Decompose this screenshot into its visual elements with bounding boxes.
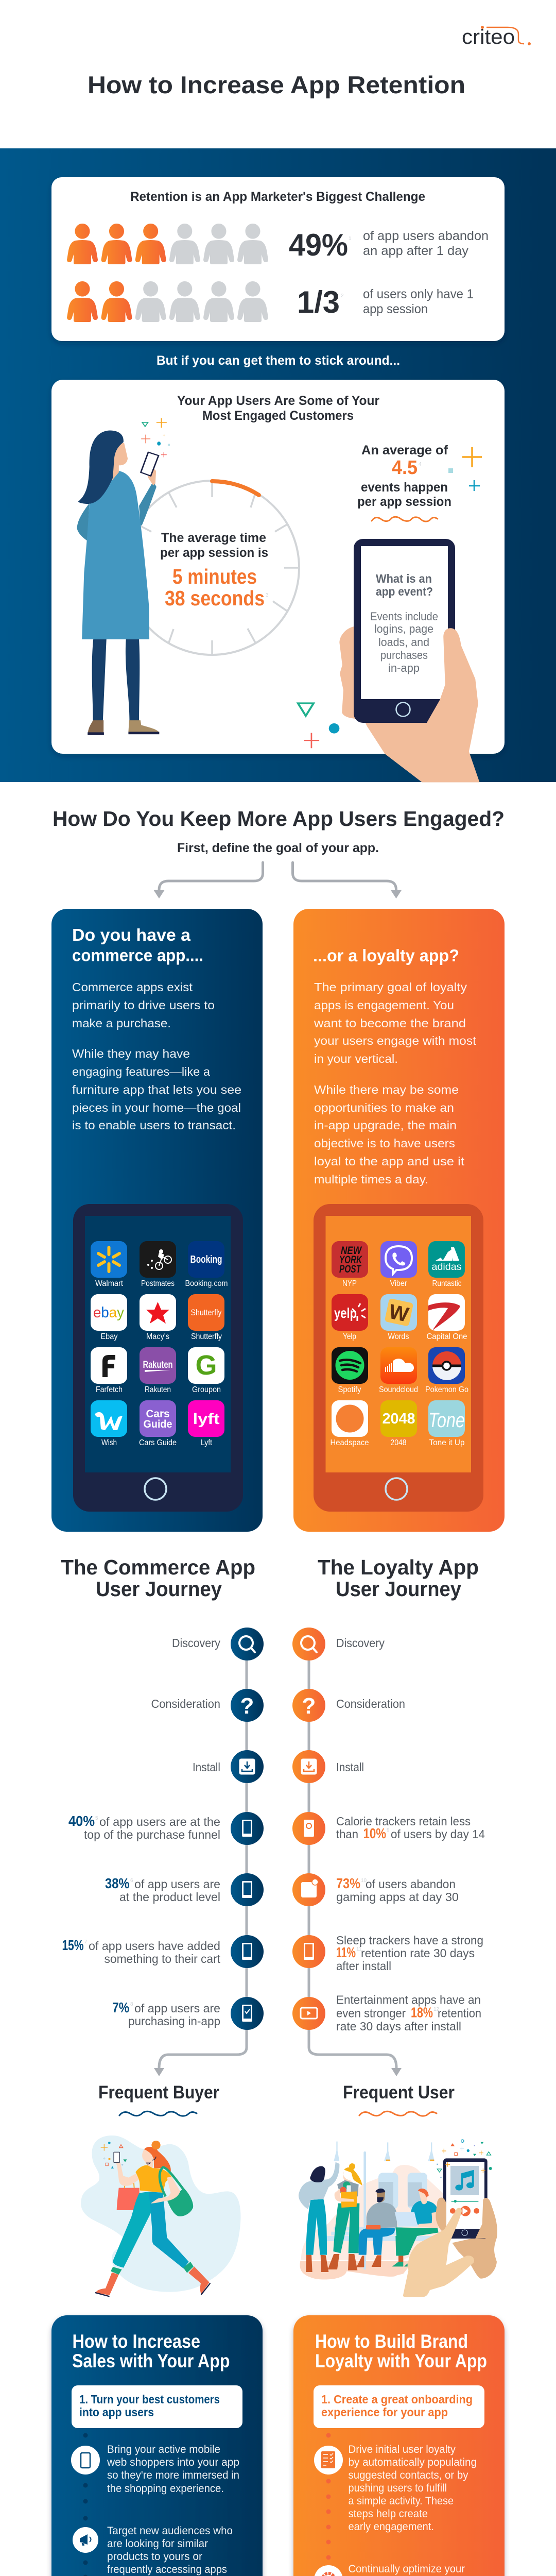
stat: 1/3: app session [363, 302, 428, 316]
app icon: SoundCloud [380, 1347, 417, 1384]
heading: loyalty journey [318, 1555, 479, 1601]
icon: plus decorations [448, 447, 482, 491]
text: what is an app event [370, 572, 438, 674]
panel: blue stats section [0, 148, 556, 782]
step: 38% [105, 1873, 264, 1906]
text: events per session: events happen [361, 480, 448, 495]
app icon: 2048: 2048 [382, 1411, 415, 1427]
step: 7%: purchasing in-app [128, 2014, 220, 2028]
card heading: Most Engaged Customers [202, 409, 354, 423]
panel heading: Loyalty with Your App [315, 2350, 487, 2371]
app icon: Pokemon Go [428, 1347, 465, 1384]
timeline: commerce journey [62, 1628, 264, 2076]
panel: loyalty app [293, 909, 505, 1532]
step: install [292, 1750, 364, 1783]
step: consideration: Consideration [151, 1697, 220, 1710]
app icon: Macy's [140, 1294, 176, 1331]
step: calorie trackers: 9 [387, 1827, 390, 1833]
step: calorie trackers: Calorie trackers retain less [336, 1815, 471, 1828]
stat: 1/3: 1/3 [297, 285, 340, 319]
tactic: target new audiences: are looking for similar [107, 2538, 208, 2550]
panel: increase sales [51, 2315, 263, 2576]
text: what is an app event: purchases [380, 649, 428, 662]
app labels: Lyft [201, 1438, 212, 1447]
arrow: to commerce [153, 862, 263, 899]
app icon: Groupon: G [195, 1350, 217, 1381]
app labels: Headspace [331, 1438, 369, 1447]
app labels: Rakuten [145, 1385, 171, 1394]
panel heading [72, 2331, 230, 2371]
illustration: frequent user on subway [299, 2140, 497, 2297]
card: biggest challenge [51, 177, 505, 341]
step: discovery: Discovery [172, 1636, 220, 1650]
step: sleep trackers: retention rate 30 days [361, 1946, 475, 1960]
text: events per session: An average of [361, 443, 448, 457]
tactic: initial user loyalty: a simple activity. These [348, 2495, 454, 2507]
step: 38%: 38% [105, 1875, 130, 1891]
heading: commerce journey [61, 1555, 255, 1601]
stat: 49%: of app users abandon [363, 229, 489, 243]
step: 7%: 8 [130, 2002, 133, 2007]
step: consideration: ? [240, 1693, 254, 1719]
app icon: Tone It Up [428, 1400, 465, 1437]
app icon: NYP [332, 1241, 368, 1278]
text: what is an app event: Events include [370, 610, 438, 623]
step: discovery [172, 1628, 264, 1660]
app icon: Wish [91, 1400, 127, 1437]
app icon: Booking: Booking [190, 1254, 222, 1265]
step: gaming apps: of users abandon [366, 1877, 456, 1891]
title: How to Increase App Retention [88, 71, 465, 98]
app icon: Shutterfly: Shutterfly [190, 1308, 222, 1317]
squiggle [372, 517, 438, 521]
panel body text: The primary goal of loyalty [314, 980, 467, 994]
step: entertainment apps: rate 30 days after install [336, 2020, 461, 2033]
app icon: NYP: YORK [339, 1254, 362, 1266]
panel body text: While there may be some [314, 1083, 459, 1096]
tactic: initial user loyalty: steps help create [348, 2508, 428, 2520]
panel body text: make a purchase. [72, 1016, 171, 1030]
panel heading: Do you have a [72, 925, 191, 944]
tactic: initial user loyalty: early engagement. [348, 2521, 434, 2533]
text: events per session: 4.5 [392, 457, 418, 479]
panel heading [315, 2331, 487, 2371]
tactic: target new audiences [73, 2525, 233, 2576]
illustration: woman with phone [77, 431, 159, 735]
step: 40%: 40% [68, 1813, 95, 1829]
step box 1: into app users [79, 2405, 154, 2419]
step: sleep trackers: after install [336, 1959, 391, 1973]
app labels: Postmates [141, 1279, 175, 1288]
app labels: Pokemon Go [425, 1385, 468, 1394]
panel body text: loyal to the app and use it [314, 1155, 465, 1168]
text: what is an app event: What is an [376, 572, 432, 585]
panel heading: commerce app.... [72, 946, 203, 964]
app labels: Wish [101, 1438, 117, 1447]
step: sleep trackers: 11% [336, 1944, 356, 1960]
step: calorie trackers: of users by day 14 [391, 1827, 485, 1841]
app labels: Tone it Up [429, 1438, 465, 1447]
step box 1 [314, 2385, 484, 2428]
panel body text: pieces in your home—the goal [72, 1101, 241, 1114]
step: 15%: 15% [62, 1937, 84, 1953]
app labels: Capital One [426, 1332, 467, 1341]
panel body text: opportunities to make an [314, 1101, 454, 1114]
logo: criteo: criteo [462, 26, 515, 48]
text: average session time [160, 531, 269, 610]
stat: 1/3 [297, 285, 474, 319]
app icon: Rakuten: Rakuten [143, 1360, 173, 1370]
text: events per session [357, 443, 451, 509]
card heading: Retention is an App Marketer's Biggest Challenge [130, 190, 425, 204]
step: entertainment apps: 18% [411, 2004, 433, 2021]
app labels: Farfetch [96, 1385, 123, 1394]
text: what is an app event: logins, page [374, 622, 433, 635]
stat: 49%: 49% [289, 228, 348, 262]
app icon: Headspace [332, 1400, 368, 1437]
panel body text: furniture app that lets you see [72, 1083, 241, 1096]
app icon: Lyft [188, 1400, 224, 1437]
illustration: commerce phone [73, 1204, 243, 1512]
panel body text: in-app upgrade, the main [314, 1118, 457, 1132]
step: sleep trackers: Sleep trackers have a strong [336, 1934, 483, 1947]
step: gaming apps: 10 [361, 1878, 367, 1884]
heading: commerce journey: User Journey [96, 1577, 222, 1601]
app icon: Rakuten [140, 1347, 176, 1384]
icon row: 2 of 6 people [67, 281, 268, 322]
app labels: Walmart [95, 1279, 124, 1288]
icon: confetti near woman [141, 418, 170, 457]
step: 7%: 7% [112, 1999, 129, 2015]
connector dots [73, 2433, 98, 2576]
step: 15%: something to their cart [104, 1952, 221, 1965]
panel body text: apps is engagement. You [314, 998, 454, 1012]
app labels: NYP [342, 1279, 357, 1288]
step: install [193, 1750, 264, 1783]
illustration: frequent buyer walking [81, 2136, 240, 2296]
step box 1: experience for your app [321, 2405, 448, 2419]
heading: loyalty journey: User Journey [336, 1577, 461, 1601]
step: install: Install [193, 1760, 220, 1774]
app icon: Spotify [332, 1347, 368, 1384]
app labels: Spotify [338, 1385, 361, 1394]
text: average session time: The average time [161, 531, 266, 545]
step: consideration [151, 1689, 264, 1722]
arrow: to loyalty [292, 862, 402, 899]
illustration: phone in hand [339, 539, 480, 782]
panel: commerce app [51, 909, 263, 1532]
panel heading: ...or a loyalty app? [313, 946, 459, 965]
tactic: initial user loyalty: Drive initial user loyalty [348, 2444, 456, 2455]
tactic: initial user loyalty: suggested contacts, or by [348, 2469, 468, 2481]
app icon: Yelp [332, 1294, 368, 1331]
app labels: Macy's [146, 1332, 169, 1341]
panel body text: your users engage with most [314, 1034, 477, 1047]
step: 15%: of app users have added [89, 1939, 220, 1953]
app icon: Farfetch [91, 1347, 127, 1384]
app icon: eBay [91, 1294, 127, 1331]
step: 15%: 7 [84, 1939, 88, 1945]
app icon: Walmart [91, 1241, 127, 1278]
card heading: Your App Users Are Some of Your [177, 394, 379, 408]
heading: loyalty journey: The Loyalty App [318, 1555, 479, 1579]
app labels: Cars Guide [139, 1438, 177, 1447]
connector dots [316, 2433, 341, 2576]
app icon: Cars Guide [140, 1400, 176, 1437]
panel body text [72, 980, 241, 1132]
text: what is an app event: app event? [376, 585, 433, 598]
app icon: Words [380, 1294, 417, 1331]
app labels [331, 1279, 468, 1447]
tactic: mobile web shoppers: Bring your active mobile [107, 2444, 220, 2455]
panel body text [314, 980, 477, 1186]
panel body text: in your vertical. [314, 1052, 398, 1065]
app icon: NYP: NEW [341, 1245, 362, 1257]
app labels: Words [388, 1332, 409, 1341]
card: engaged customers [51, 380, 505, 782]
timeline: loyalty journey [292, 1628, 485, 2076]
step: install: Install [336, 1760, 364, 1774]
text: average session time: 38 seconds [165, 586, 265, 610]
text: events per session: per app session [357, 495, 451, 509]
step box 1: 1. Create a great onboarding [321, 2393, 473, 2406]
step: 7%: of app users are [134, 2002, 220, 2015]
app labels [95, 1279, 228, 1447]
panel body text: While they may have [72, 1047, 190, 1060]
step: 38%: at the product level [119, 1890, 220, 1904]
app icon: Shutterfly [188, 1294, 224, 1331]
subheading: First, define the goal of your app. [177, 841, 379, 855]
panel body text: engaging features—like a [72, 1065, 210, 1078]
step: consideration: Consideration [336, 1697, 405, 1710]
tactic: mobile web shoppers [71, 2444, 239, 2495]
step: entertainment apps: Entertainment apps have an [336, 1993, 481, 2006]
step: discovery: Discovery [336, 1636, 385, 1650]
tactic: target new audiences: frequently accessing apps [107, 2564, 227, 2575]
step: 38%: 6 [130, 1878, 133, 1884]
app icon: Yelp: yelp [334, 1305, 357, 1321]
stat: 49% [289, 228, 489, 262]
panel heading: How to Increase [72, 2331, 200, 2352]
panel body text: primarily to drive users to [72, 998, 215, 1012]
step: gaming apps: gaming apps at day 30 [336, 1890, 459, 1904]
app icon: adidas: adidas [431, 1262, 461, 1273]
panel heading [72, 925, 203, 964]
app labels: Booking.com [185, 1279, 228, 1288]
app icon: Tone It Up: Tone [428, 1409, 465, 1432]
card heading [177, 394, 379, 423]
app icon: Words: W [387, 1300, 411, 1327]
tactic: initial user loyalty [314, 2444, 477, 2533]
step box 1 [72, 2385, 242, 2428]
text: average session time: per app session is [160, 546, 268, 560]
heading: frequent user: Frequent User [343, 2082, 455, 2103]
step: entertainment apps: even stronger [336, 2006, 406, 2020]
stat: 1/3: 2 [341, 293, 344, 299]
app icon: Cars Guide: Cars [146, 1408, 170, 1420]
app labels: Soundcloud [379, 1385, 418, 1394]
step: sleep trackers: 11 [356, 1946, 362, 1952]
app labels: Viber [390, 1279, 407, 1288]
tactic: continually optimize: Continually optimize your [348, 2563, 465, 2575]
step: 40% [68, 1812, 264, 1845]
stat: 49%: 1 [349, 236, 352, 242]
arrow head [391, 2068, 402, 2076]
step: entertainment apps: retention [438, 2006, 481, 2020]
app icon: adidas [428, 1241, 465, 1278]
step: 7% [112, 1997, 264, 2030]
tactic: mobile web shoppers: the shopping experience. [107, 2483, 224, 2495]
step: calorie trackers: 10% [363, 1825, 386, 1841]
panel body text: multiple times a day. [314, 1173, 428, 1186]
icon row: 3 of 6 people [67, 224, 268, 264]
text: what is an app event: in-app [388, 662, 420, 674]
step: consideration: ? [302, 1693, 316, 1719]
icon: confetti near phone [298, 703, 339, 748]
stat: 1/3: of users only have 1 [363, 287, 474, 301]
arrow head [154, 2068, 164, 2076]
heading: frequent user [343, 2082, 455, 2116]
text: average session time: 5 minutes [172, 565, 257, 588]
tactic: initial user loyalty: by automatically populating [348, 2456, 477, 2468]
step: 40%: 5 [95, 1816, 98, 1821]
panel body text: Commerce apps exist [72, 980, 193, 994]
app labels: Ebay [101, 1332, 117, 1341]
chart: session clock dial [125, 481, 299, 655]
text: what is an app event: loads, and [378, 636, 429, 649]
app icon: Lyft: lyft [193, 1411, 220, 1428]
step: 40%: of app users are at the [99, 1815, 220, 1828]
stat: 49%: an app after 1 day [363, 244, 468, 258]
app icon: eBay: ebay [93, 1304, 124, 1321]
step: consideration [292, 1689, 405, 1722]
app labels: Runtastic [432, 1279, 461, 1288]
panel: brand loyalty [293, 2315, 505, 2576]
text: events per session: 4 [419, 462, 422, 467]
heading: frequent buyer [98, 2082, 219, 2116]
text: transition line: But if you can get them to stick around... [157, 353, 400, 368]
step: sleep trackers [292, 1934, 483, 1973]
tactic: mobile web shoppers: so they're more immersed in [107, 2469, 239, 2481]
app icon: Cars Guide: Guide [143, 1418, 172, 1430]
panel body text: is to enable users to transact. [72, 1118, 236, 1132]
app icon: Groupon [188, 1347, 224, 1384]
panel heading: Sales with Your App [72, 2350, 230, 2371]
illustration: loyalty phone [314, 1204, 483, 1512]
step: 15% [62, 1935, 264, 1968]
step: entertainment apps [292, 1993, 481, 2033]
step: discovery [292, 1628, 385, 1660]
heading: frequent buyer: Frequent Buyer [98, 2082, 219, 2103]
step: 40%: top of the purchase funnel [84, 1828, 220, 1841]
tactic: target new audiences: Target new audiences who [107, 2525, 233, 2537]
app icon: 2048 [380, 1400, 417, 1437]
step: gaming apps: 73% [336, 1875, 360, 1891]
step: 38%: of app users are [134, 1877, 220, 1891]
panel body text: objective is to have users [314, 1137, 455, 1150]
panel body text: want to become the brand [314, 1016, 466, 1030]
app labels: 2048 [390, 1438, 407, 1447]
step: gaming apps [292, 1873, 459, 1906]
step: calorie trackers [292, 1812, 485, 1845]
app icon: Capital One [428, 1294, 465, 1331]
heading: commerce journey: The Commerce App [61, 1555, 255, 1579]
app labels: Yelp [343, 1332, 356, 1341]
tactic: initial user loyalty: pushing users to fulfill [348, 2482, 447, 2494]
app icon: Viber [380, 1241, 417, 1278]
heading: keep users engaged: How Do You Keep More App Users Engaged? [53, 807, 505, 831]
step: entertainment apps: 12 [433, 2007, 440, 2012]
tactic: continually optimize [314, 2563, 483, 2576]
app labels: Groupon [192, 1385, 221, 1394]
app icon: Booking [188, 1241, 224, 1278]
tactic: mobile web shoppers: web shoppers into your app [107, 2456, 239, 2468]
app labels: Shutterfly [191, 1332, 222, 1341]
panel heading: How to Build Brand [315, 2331, 468, 2352]
tactic: target new audiences: products to yours or [107, 2551, 202, 2563]
app icon: NYP: POST [339, 1263, 362, 1275]
text: average session time: 3 [266, 592, 269, 598]
step: calorie trackers: than [336, 1827, 358, 1841]
app icon: Postmates [140, 1241, 176, 1278]
step box 1: 1. Turn your best customers [79, 2393, 220, 2406]
